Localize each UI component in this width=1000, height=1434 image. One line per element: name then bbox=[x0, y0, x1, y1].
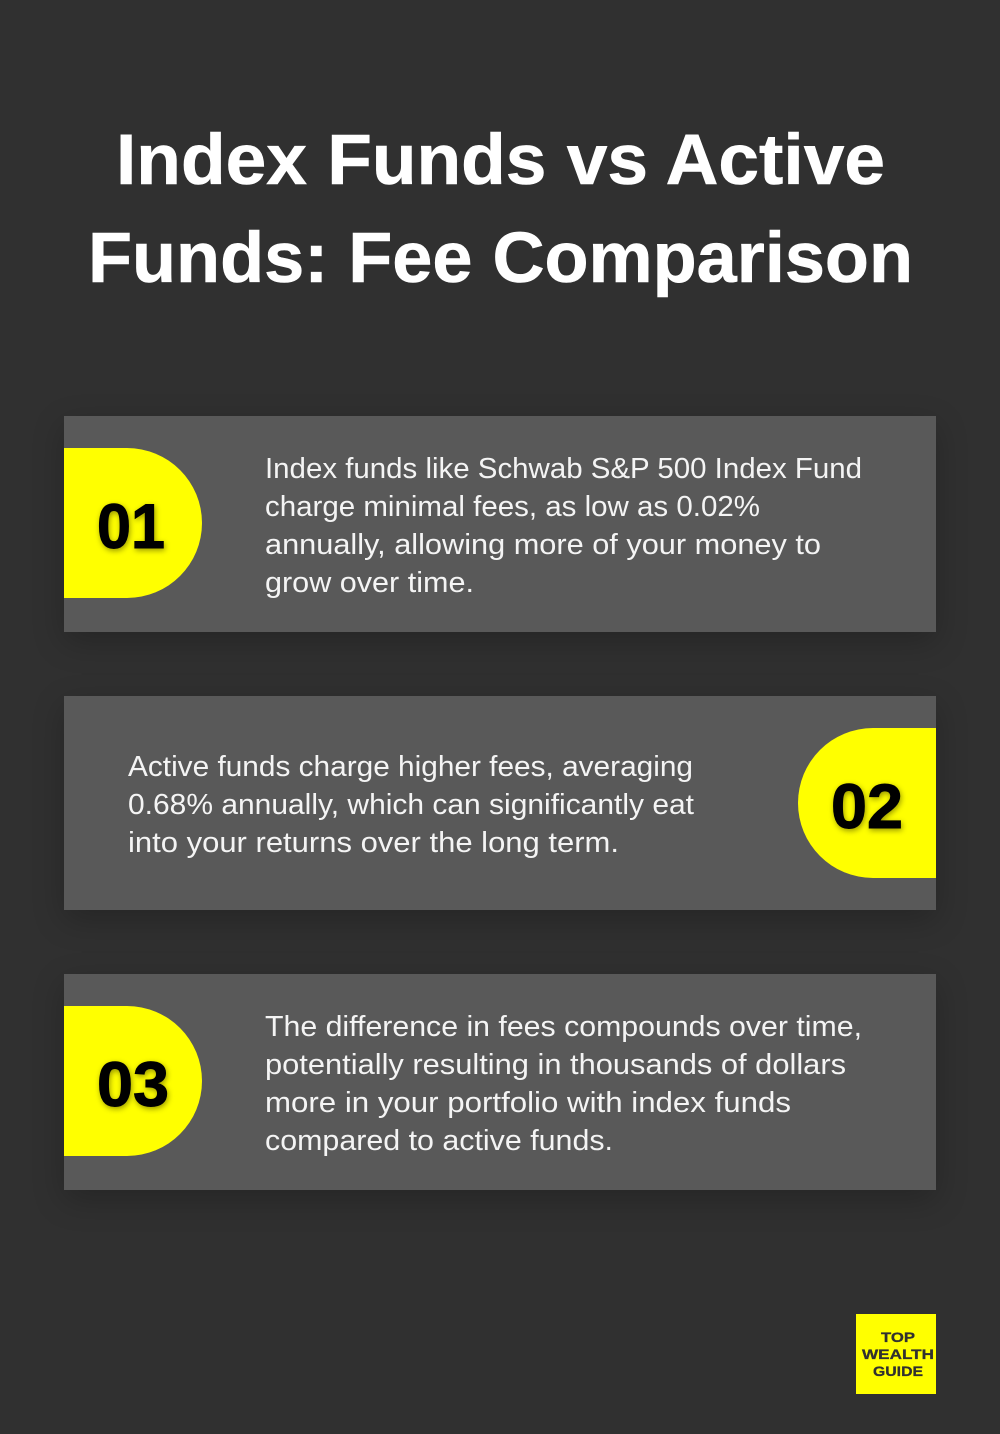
text block: index funds: charge minimal fees, as low as 0.02% bbox=[265, 491, 760, 523]
logo: Top Wealth Guide: TOP bbox=[881, 1329, 915, 1345]
logo: Top Wealth Guide bbox=[856, 1314, 936, 1394]
badge 02 bbox=[798, 728, 936, 878]
badge 01: 01 bbox=[97, 492, 165, 562]
text block: index funds: annually, allowing more of your money to bbox=[265, 529, 821, 561]
logo: Top Wealth Guide: WEALTH bbox=[862, 1346, 934, 1362]
badge 03: 03 bbox=[97, 1050, 169, 1120]
text block: active funds: 0.68% annually, which can significantly eat bbox=[128, 789, 694, 821]
badge 01 bbox=[64, 448, 202, 598]
text block: compounding: compared to active funds. bbox=[265, 1125, 613, 1157]
text block: index funds: grow over time. bbox=[265, 567, 474, 599]
text block: index funds bbox=[265, 453, 862, 599]
text block: compounding: The difference in fees compounds over time, bbox=[265, 1011, 862, 1043]
badge 02: 02 bbox=[831, 772, 903, 842]
text block: compounding bbox=[265, 1011, 862, 1157]
text block: active funds: into your returns over the long term. bbox=[128, 827, 619, 859]
logo: Top Wealth Guide: GUIDE bbox=[873, 1363, 923, 1379]
text block: compounding: more in your portfolio with index funds bbox=[265, 1087, 791, 1119]
panel: compounding difference bbox=[64, 974, 936, 1190]
title: Funds: Fee Comparison bbox=[88, 219, 913, 298]
title: Index Funds vs Active bbox=[116, 121, 885, 200]
text block: active funds bbox=[128, 751, 694, 859]
text block: compounding: potentially resulting in thousands of dollars bbox=[265, 1049, 846, 1081]
badge 03 bbox=[64, 1006, 202, 1156]
panel: active fund fees bbox=[64, 696, 936, 910]
text block: active funds: Active funds charge higher fees, averaging bbox=[128, 751, 693, 783]
text block: index funds: Index funds like Schwab S&P 500 Index Fund bbox=[265, 453, 862, 485]
panel: index fund fees bbox=[64, 416, 936, 632]
title bbox=[88, 121, 913, 298]
